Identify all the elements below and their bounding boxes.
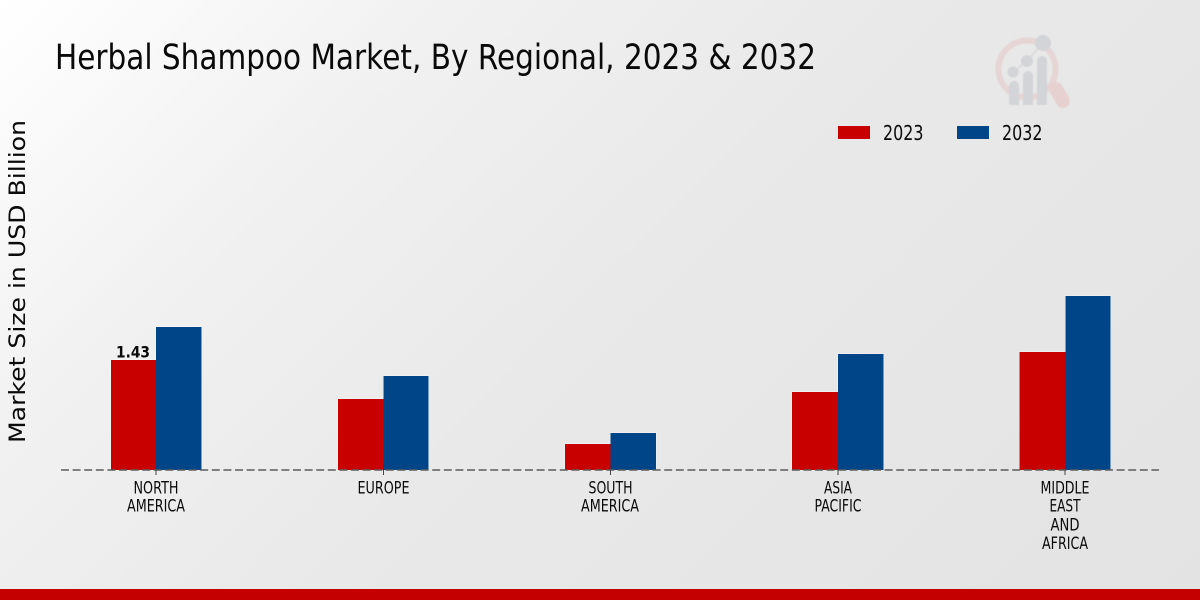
- x label: Asia Pacific: ASIA: [824, 478, 853, 498]
- x label: Middle East and Africa: EAST: [1050, 496, 1081, 516]
- x axis baseline: [61, 470, 1159, 475]
- x label: South America: AMERICA: [581, 496, 640, 516]
- y axis label: Market Size in USD Billion: [5, 120, 31, 443]
- Europe bars: [338, 376, 428, 470]
- x label: Europe: EUROPE: [358, 478, 410, 498]
- watermark logo icon: [998, 35, 1063, 105]
- x label: North America: [127, 478, 186, 516]
- legend item: 2032: 2032: [1002, 121, 1042, 145]
- x label: South America: SOUTH: [588, 478, 632, 498]
- Asia Pacific bars: [792, 354, 884, 470]
- North America bars: [111, 327, 202, 470]
- bottom red bar: [0, 589, 1200, 600]
- x label: South America: [581, 478, 640, 516]
- x label: North America: NORTH: [134, 478, 178, 498]
- x label: Asia Pacific: [814, 478, 862, 516]
- South America bars: [565, 433, 656, 470]
- legend item: 2032: [957, 121, 1042, 145]
- x label: Middle East and Africa: MIDDLE: [1040, 478, 1090, 498]
- Middle East and Africa bars: [1020, 296, 1110, 470]
- x label: Asia Pacific: PACIFIC: [814, 496, 862, 516]
- x label: Middle East and Africa: [1040, 478, 1090, 553]
- legend item: 2023: [838, 121, 924, 145]
- legend: [838, 121, 1042, 145]
- bar chart: [61, 296, 1159, 553]
- x label: Middle East and Africa: AND: [1050, 516, 1080, 534]
- value label: 1.43: 1.43: [116, 342, 150, 362]
- legend item: 2023: 2023: [883, 121, 924, 145]
- x label: Middle East and Africa: AFRICA: [1042, 534, 1089, 553]
- title: Herbal Shampoo Market, By Regional, 2023 & 2032: [55, 38, 816, 78]
- x label: North America: AMERICA: [127, 496, 186, 516]
